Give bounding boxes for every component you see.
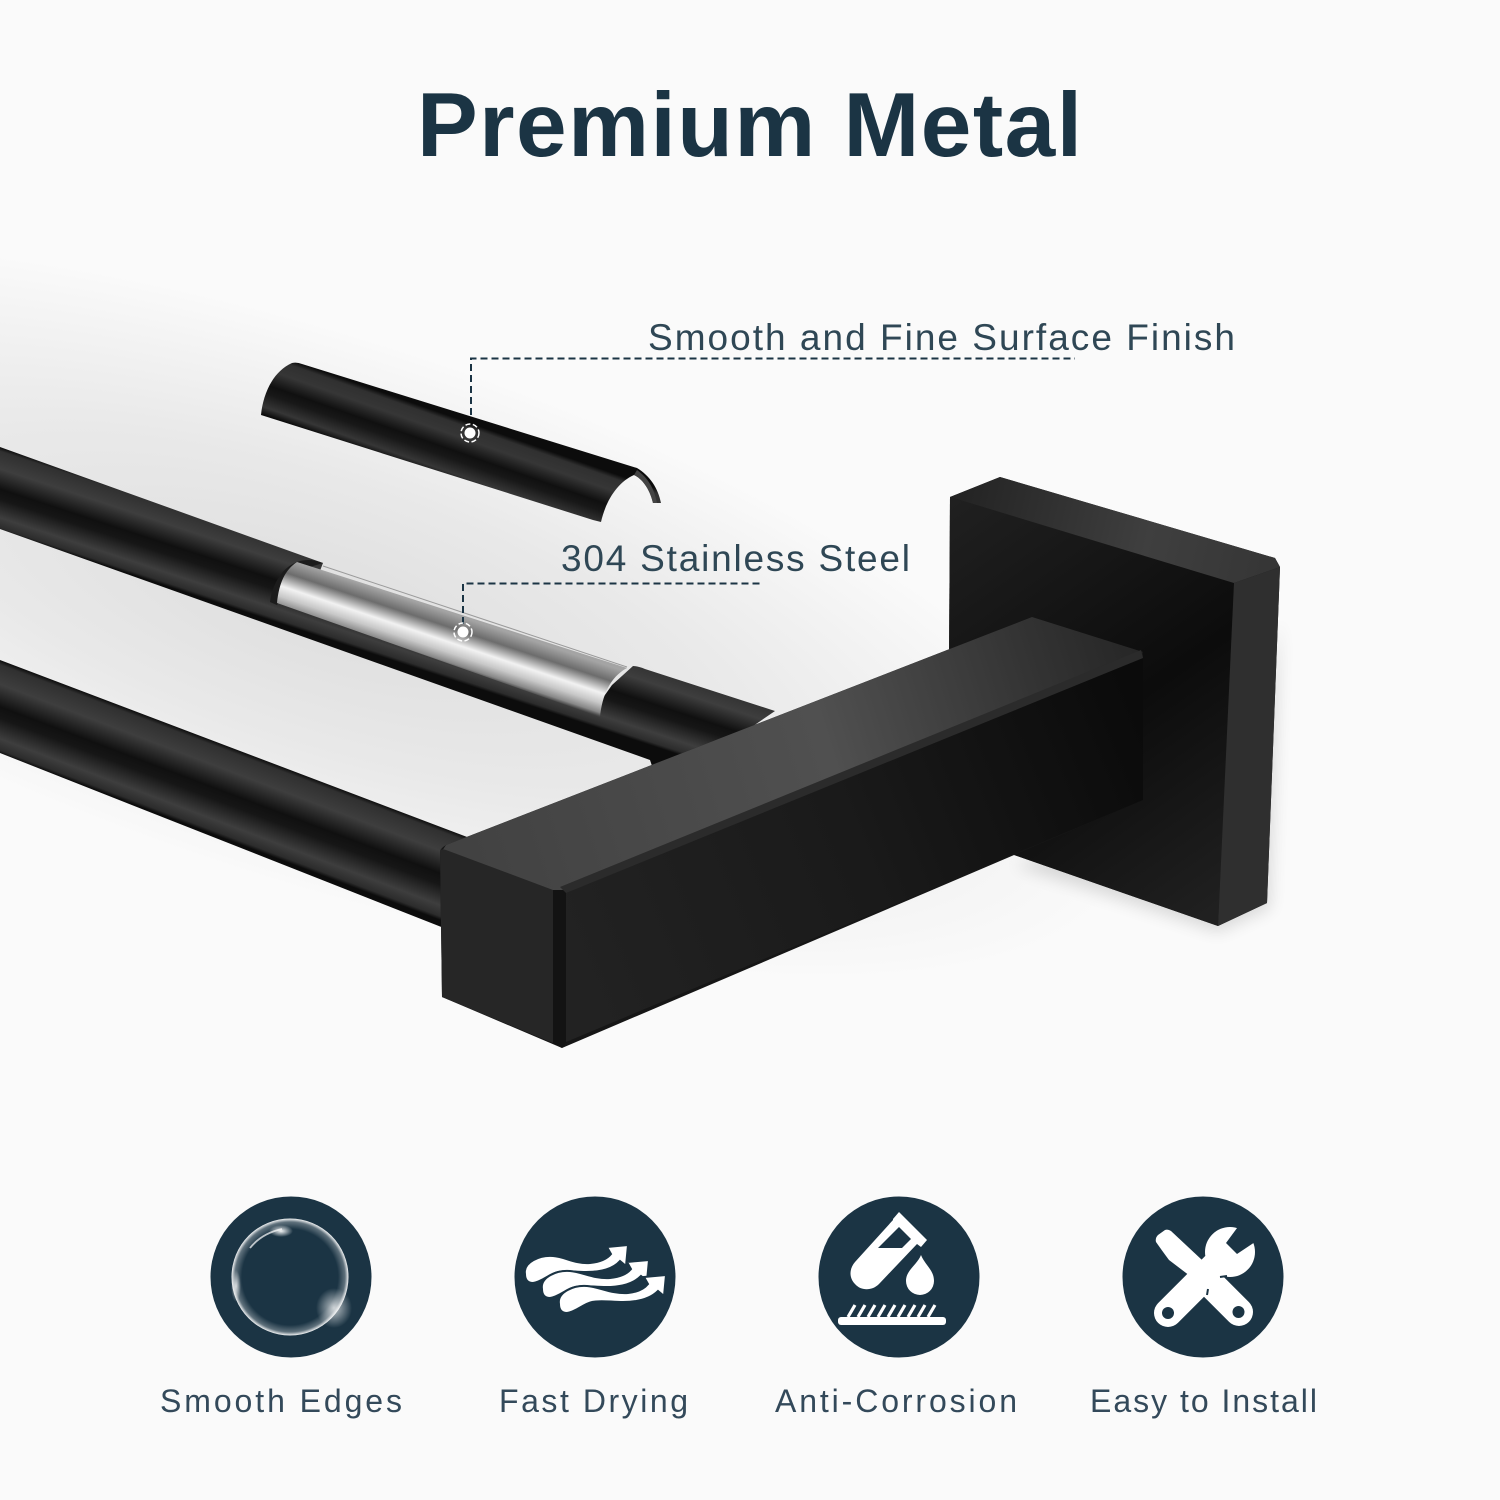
icon: airflow arrows: [514, 1196, 676, 1358]
title: Premium Metal: [417, 75, 1082, 176]
label: Fast Drying: [499, 1383, 688, 1419]
plate top edge: [950, 477, 1280, 583]
marker: shell: [461, 424, 479, 442]
icon: water bubble: [210, 1196, 372, 1358]
wall mounting plate: [948, 477, 1280, 926]
coating rim: [270, 560, 323, 605]
plate silhouette: [948, 477, 1280, 926]
label: Easy to Install: [1090, 1383, 1317, 1419]
label: stainless steel: 304 Stainless Steel: [561, 538, 910, 579]
callout: 304 stainless steel: [463, 538, 910, 624]
square support arm: [440, 617, 1143, 1048]
label: surface finish: Smooth and Fine Surface Finish: [648, 317, 1235, 358]
arm side face: [566, 658, 1143, 1042]
lower towel rod: [0, 660, 520, 958]
label: Anti-Corrosion: [775, 1383, 1017, 1419]
feature: anti-corrosion: [775, 1196, 1017, 1419]
removed half-shell of coating: [261, 363, 661, 522]
feature: easy to install: [1090, 1196, 1317, 1419]
plate front face: [948, 497, 1234, 926]
plate right edge: [1218, 567, 1280, 926]
arm top face: [442, 617, 1143, 892]
arm corner bevel: [553, 890, 567, 1048]
marker: steel: [454, 623, 472, 641]
feature: fast drying: [499, 1196, 688, 1419]
icon: test tube and droplet: [818, 1196, 980, 1358]
rod coating: [0, 447, 775, 790]
upper towel rod with cutaway: [0, 447, 775, 790]
feature: smooth edges: [160, 1196, 402, 1419]
callout: smooth and fine surface finish: [471, 317, 1235, 415]
wall plate shadow: [1015, 620, 1280, 932]
icon: crossed tools: [1122, 1196, 1284, 1358]
arm end face: [440, 849, 553, 1043]
arm top bevel: [560, 650, 1143, 893]
stainless steel core: [277, 562, 627, 717]
label: Smooth Edges: [160, 1383, 402, 1419]
arm silhouette: [440, 617, 1143, 1048]
